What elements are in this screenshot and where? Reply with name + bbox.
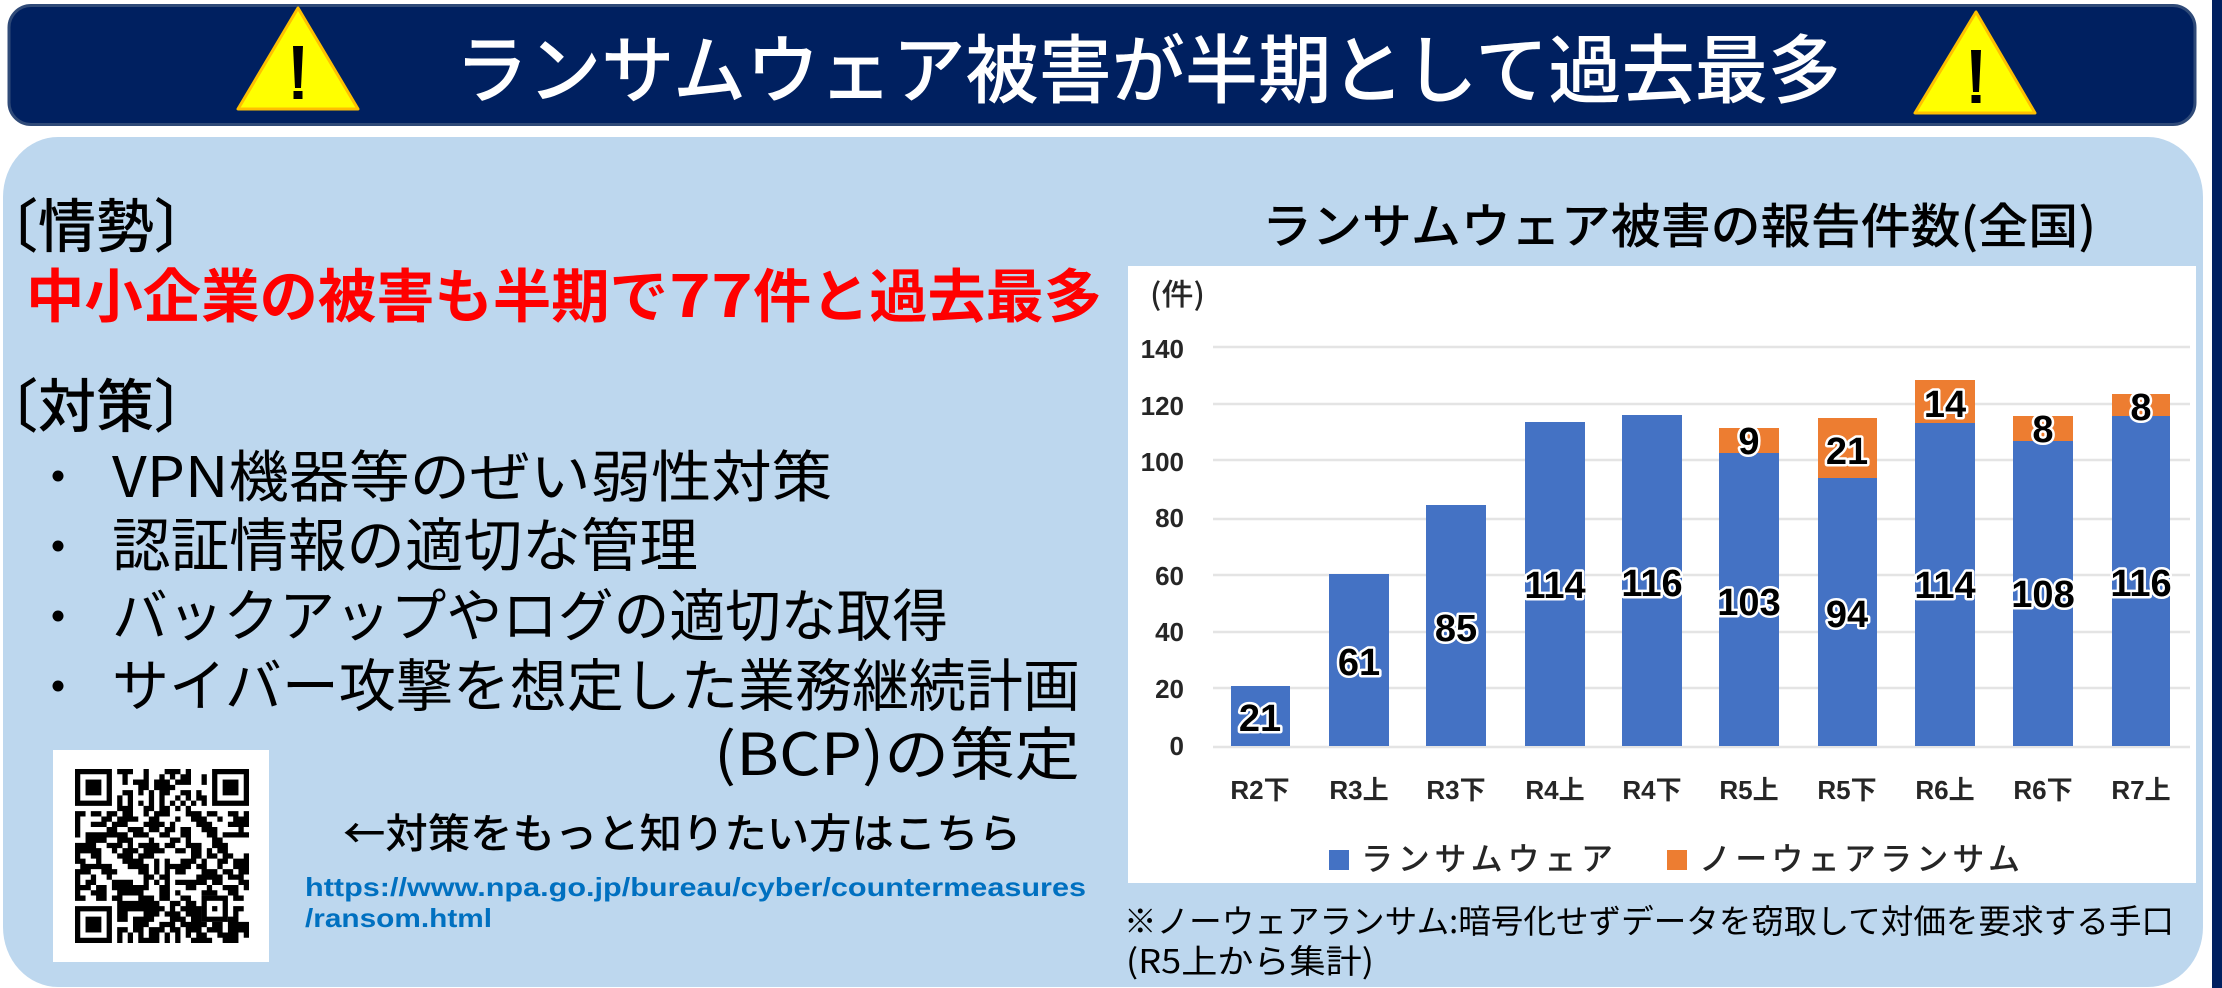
x axis labels: R7上 xyxy=(2111,775,2171,805)
QR caption: ←対策をもっと知りたい方はこちら xyxy=(343,800,1021,860)
x axis labels xyxy=(1230,775,2171,805)
URL: https://www.npa.go.jp/bureau/cyber/countermeasures xyxy=(305,872,1086,902)
y axis labels: 120 xyxy=(1141,391,1184,421)
legend: ノーウェアランサム xyxy=(1699,834,2020,880)
y axis labels: 20 xyxy=(1155,674,1184,704)
y axis labels: 60 xyxy=(1155,561,1184,591)
value labels: 61 xyxy=(1338,642,1380,684)
y axis labels: 0 xyxy=(1170,731,1184,761)
title: ランサムウェア被害が半期として過去最多 xyxy=(455,10,1841,119)
list: countermeasures: VPN機器等のぜい弱性対策 xyxy=(112,433,832,514)
value labels: 21 xyxy=(1239,698,1281,740)
value labels xyxy=(1239,384,2172,740)
value labels: 8 xyxy=(2130,387,2152,429)
x axis labels: R6下 xyxy=(2013,775,2073,805)
x axis labels: R4下 xyxy=(1622,775,1682,805)
footnote: ※ノーウェアランサム:暗号化せずデータを窃取して対価を要求する手口 xyxy=(1124,895,2174,943)
value labels: 116 xyxy=(2110,563,2172,605)
list: countermeasures: (BCP)の策定 xyxy=(714,708,1080,792)
chart title: ランサムウェア被害の報告件数(全国) xyxy=(1262,187,2096,257)
legend xyxy=(1329,834,2020,880)
y axis labels: 140 xyxy=(1141,334,1184,364)
x axis labels: R4上 xyxy=(1525,775,1585,805)
bar chart xyxy=(1128,266,2196,883)
value labels: 114 xyxy=(1914,565,1976,607)
x axis labels: R6上 xyxy=(1915,775,1975,805)
footnote xyxy=(1124,895,2174,983)
value labels: 8 xyxy=(2032,409,2054,451)
x axis labels: R3上 xyxy=(1329,775,1389,805)
QR code xyxy=(53,750,269,962)
value labels: 85 xyxy=(1435,608,1477,650)
bar chart: (件) xyxy=(1150,270,1205,314)
callout: SME damage record: 77 xyxy=(669,250,753,334)
list: countermeasures: バックアップやログの適切な取得 xyxy=(112,571,948,653)
value labels: 21 xyxy=(1826,431,1868,473)
icon: left warning triangle xyxy=(238,8,358,109)
value labels: 114 xyxy=(1524,565,1586,607)
y axis labels: 100 xyxy=(1141,447,1184,477)
value labels: 14 xyxy=(1924,384,1966,426)
value labels: 94 xyxy=(1826,594,1868,636)
URL: /ransom.html xyxy=(305,903,492,933)
URL xyxy=(305,872,1086,933)
icon: right warning triangle xyxy=(1915,12,2035,113)
legend: ランサムウェア xyxy=(1361,834,1613,880)
value labels: 116 xyxy=(1621,563,1683,605)
list: countermeasures: サイバー攻撃を想定した業務継続計画 xyxy=(112,641,1080,723)
callout: SME damage record: 中小企業の被害も半期で xyxy=(26,250,668,334)
x axis labels: R2下 xyxy=(1230,775,1290,805)
list: countermeasures: 認証情報の適切な管理 xyxy=(112,499,698,583)
title banner xyxy=(9,6,2195,124)
value labels: 9 xyxy=(1738,421,1760,463)
value labels: 108 xyxy=(2011,574,2075,616)
y axis labels: 80 xyxy=(1155,503,1184,533)
footnote: (R5上から集計) xyxy=(1126,935,1374,983)
callout: SME damage record xyxy=(26,250,1102,334)
list: countermeasures xyxy=(52,433,1080,792)
x axis labels: R5下 xyxy=(1817,775,1877,805)
value labels: 103 xyxy=(1717,582,1781,624)
y axis labels xyxy=(1141,334,1184,761)
x axis labels: R5上 xyxy=(1719,775,1779,805)
x axis labels: R3下 xyxy=(1426,775,1486,805)
ransomware bars xyxy=(1231,415,2170,746)
callout: SME damage record: 件と過去最多 xyxy=(753,250,1102,334)
y axis labels: 40 xyxy=(1155,617,1184,647)
no-ware ransom bars xyxy=(1719,380,2170,478)
